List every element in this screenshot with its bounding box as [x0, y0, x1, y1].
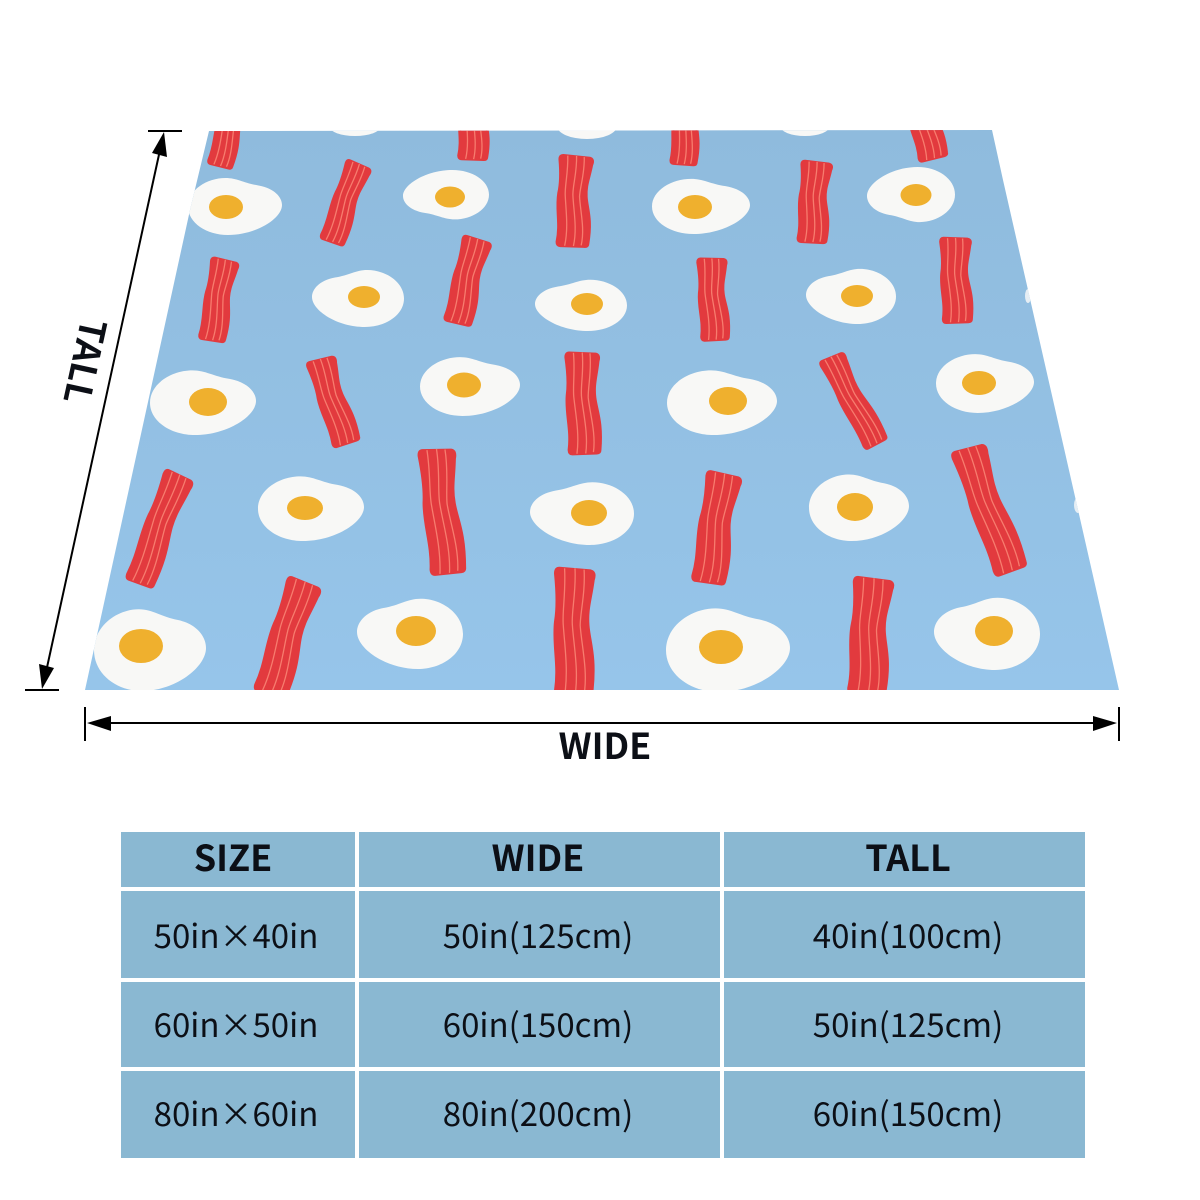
- row: 80in x 60in: [121, 1071, 1085, 1158]
- header row: TALL: [865, 830, 951, 882]
- row: 50in x 40in: 40in(100cm): [813, 910, 1003, 958]
- row: 60in x 50in: 50in(125cm): [813, 999, 1003, 1047]
- tall label: TALL: [52, 315, 122, 409]
- wide label: WIDE: [559, 718, 651, 770]
- wide dimension arrow: [85, 707, 1119, 741]
- row: 80in x 60in: 80in×60in: [154, 1088, 318, 1136]
- row: 60in x 50in: 60in(150cm): [443, 999, 633, 1047]
- row: 80in x 60in: 80in(200cm): [443, 1088, 633, 1136]
- blanket fabric: [85, 130, 1119, 690]
- tall dimension arrow: [25, 131, 182, 690]
- header row: SIZE: [194, 830, 272, 882]
- row: 50in x 40in: 50in×40in: [154, 910, 318, 958]
- fried eggs: [94, 113, 1082, 692]
- header row: WIDE: [492, 830, 584, 882]
- blanket pattern: [94, 78, 1082, 699]
- row: 80in x 60in: 60in(150cm): [813, 1088, 1003, 1136]
- row: 50in x 40in: [121, 891, 1085, 978]
- row: 60in x 50in: 60in×50in: [154, 999, 318, 1047]
- blanket: [85, 78, 1119, 699]
- row: 60in x 50in: [121, 982, 1085, 1067]
- size table: [121, 830, 1085, 1158]
- bacon strips: [126, 78, 1028, 699]
- row: 50in x 40in: 50in(125cm): [443, 910, 633, 958]
- header row: [121, 830, 1085, 887]
